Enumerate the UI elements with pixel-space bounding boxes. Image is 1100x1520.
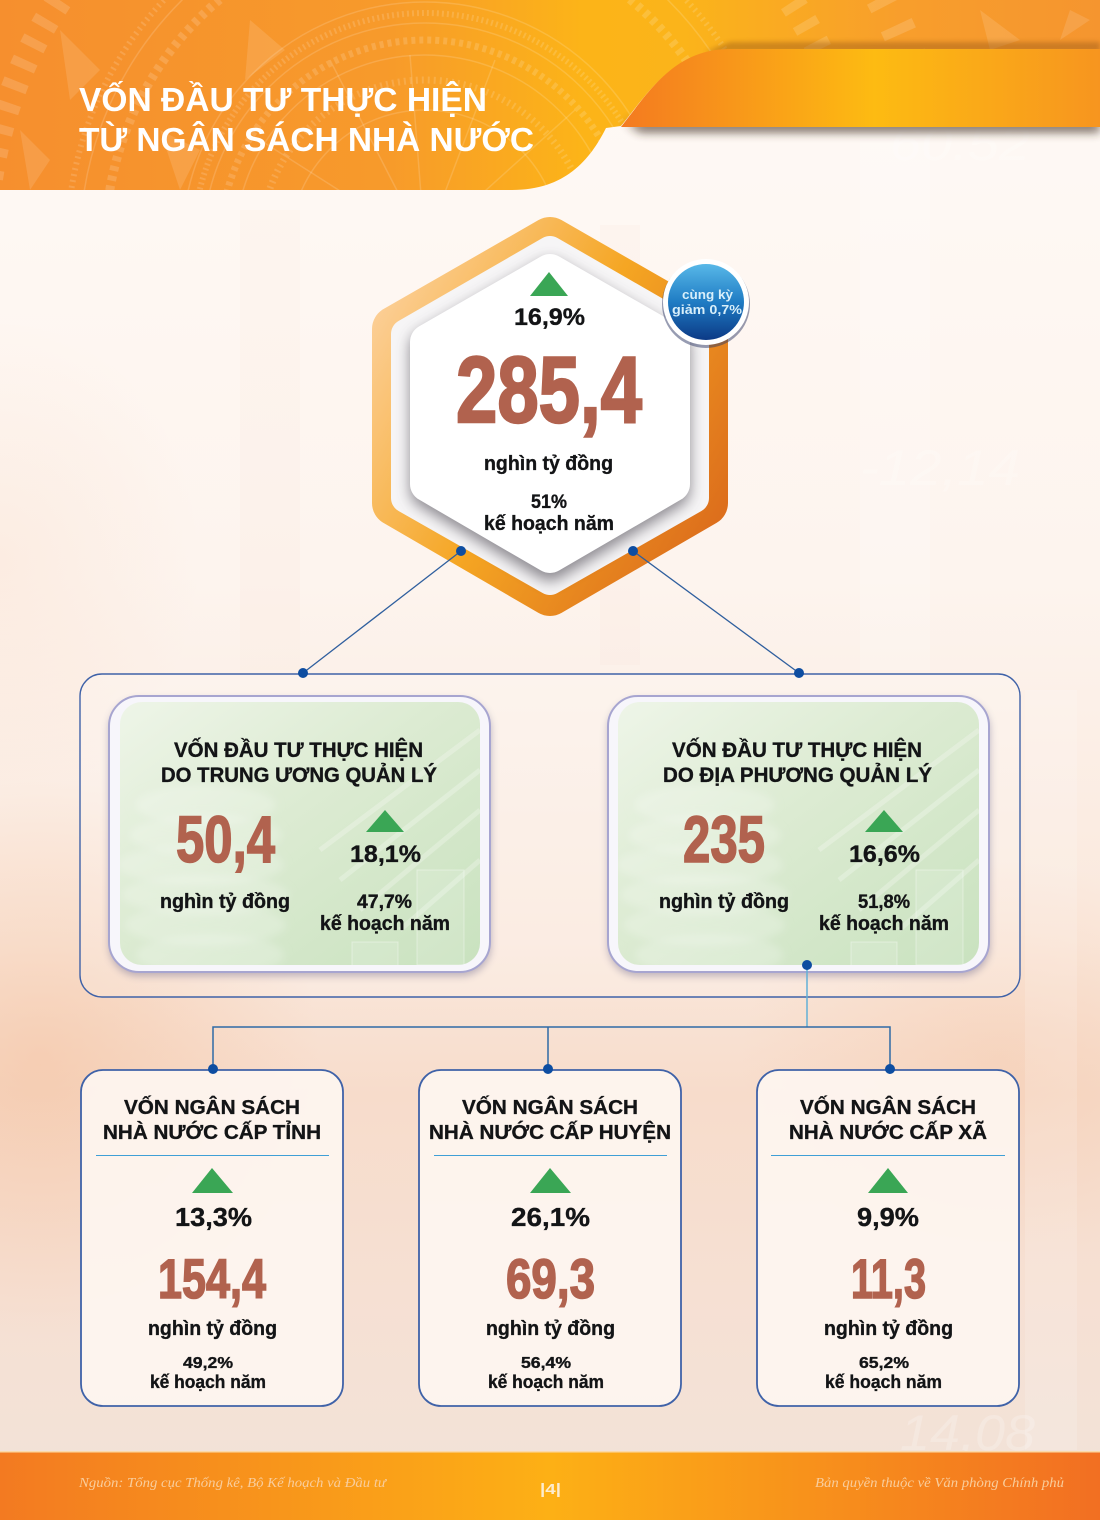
- percent of plan: 47,7%: [357, 892, 412, 913]
- value: 154,4: [158, 1247, 266, 1310]
- card heading: VỐN ĐẦU TƯ THỰC HIỆN: [672, 738, 922, 762]
- coin stack decoration: [614, 730, 979, 977]
- unit: nghìn tỷ đồng: [484, 453, 613, 475]
- icon: green up triangle: [530, 272, 568, 296]
- growth rate: 26,1%: [511, 1202, 590, 1232]
- connector: hexagon to central card: [298, 546, 466, 678]
- hexagon inner face: [428, 272, 672, 555]
- card heading: VỐN NGÂN SÁCH: [462, 1095, 638, 1119]
- percent of plan: 65,2%: [859, 1355, 909, 1372]
- panel: central managed: [109, 696, 491, 977]
- header band shadow: [626, 122, 1100, 132]
- badge: same period: giảm 0,7%: [672, 302, 742, 317]
- growth rate: 18,1%: [350, 841, 421, 868]
- panel: commune level: [757, 1070, 1019, 1406]
- unit: nghìn tỷ đồng: [148, 1318, 277, 1340]
- plan label: kế hoạch năm: [488, 1372, 604, 1392]
- hexagon white plate: [406, 251, 694, 580]
- growth rate: 13,3%: [175, 1202, 252, 1232]
- header drum pattern: [0, 0, 1090, 190]
- percent of plan: 49,2%: [183, 1355, 233, 1372]
- panel: management group frame: [80, 674, 1020, 997]
- icon: green up triangle: [530, 1168, 571, 1193]
- value: 11,3: [851, 1247, 926, 1310]
- card heading: VỐN ĐẦU TƯ THỰC HIỆN: [174, 738, 423, 762]
- plan label: kế hoạch năm: [484, 513, 614, 535]
- growth rate: 16,6%: [849, 841, 920, 868]
- header banner: [0, 0, 1100, 190]
- plan label: kế hoạch năm: [320, 913, 450, 935]
- panel: province level: [81, 1070, 343, 1406]
- coin stack decoration: [115, 730, 480, 977]
- card heading line 2: DO TRUNG ƯƠNG QUẢN LÝ: [161, 763, 437, 787]
- title: TỪ NGÂN SÁCH NHÀ NƯỚC: [79, 121, 534, 158]
- plan label: kế hoạch năm: [825, 1372, 942, 1392]
- card heading: VỐN NGÂN SÁCH: [800, 1095, 976, 1119]
- hexagon: total investment: [395, 240, 705, 593]
- percent of plan: 56,4%: [521, 1355, 571, 1372]
- source note: Nguồn: Tổng cục Thống kê, Bộ Kế hoạch và Đầu tư: [78, 1476, 387, 1491]
- card heading line 2: NHÀ NƯỚC CẤP TỈNH: [103, 1120, 321, 1144]
- growth rate: 16,9%: [514, 304, 585, 331]
- icon: green up triangle: [192, 1168, 233, 1193]
- header ribbon band: [621, 49, 1100, 127]
- page background: -12,14: [860, 440, 1020, 496]
- page background: 14,08: [900, 1405, 1035, 1461]
- plan label: kế hoạch năm: [150, 1372, 266, 1392]
- copyright note: Bản quyền thuộc về Văn phòng Chính phủ: [815, 1476, 1064, 1491]
- card heading line 2: NHÀ NƯỚC CẤP HUYỆN: [429, 1120, 671, 1144]
- icon: green up triangle: [366, 810, 404, 832]
- percent of plan: 51,8%: [858, 892, 910, 913]
- title: VỐN ĐẦU TƯ THỰC HIỆN: [79, 80, 487, 118]
- value: 50,4: [176, 802, 275, 876]
- main value: 285,4: [456, 337, 642, 442]
- unit: nghìn tỷ đồng: [824, 1318, 953, 1340]
- panel: locally managed: [608, 696, 990, 977]
- title: [79, 80, 534, 158]
- card heading line 2: DO ĐỊA PHƯƠNG QUẢN LÝ: [663, 763, 932, 787]
- card heading: VỐN NGÂN SÁCH: [124, 1095, 300, 1119]
- icon: green up triangle: [865, 810, 903, 832]
- unit: nghìn tỷ đồng: [486, 1318, 615, 1340]
- hexagon outer ring: [395, 240, 705, 593]
- growth rate: 9,9%: [857, 1202, 919, 1232]
- header top shadow: [705, 42, 1100, 52]
- connector: hexagon to local card: [628, 546, 804, 678]
- unit: nghìn tỷ đồng: [659, 891, 789, 913]
- connector: local card to three levels: [208, 960, 895, 1074]
- unit: nghìn tỷ đồng: [160, 891, 290, 913]
- card heading line 2: NHÀ NƯỚC CẤP XÃ: [789, 1120, 987, 1144]
- badge: same period: cùng kỳ: [682, 287, 734, 302]
- panel: district level: [419, 1070, 681, 1406]
- plan label: kế hoạch năm: [819, 913, 949, 935]
- footer: [0, 1451, 1100, 1520]
- icon: green up triangle: [868, 1168, 908, 1193]
- percent of plan: 51%: [531, 492, 567, 513]
- value: 69,3: [506, 1247, 595, 1310]
- page background: 60.52: [890, 118, 1030, 171]
- page number: |4|: [540, 1481, 561, 1498]
- hexagon shadow: [428, 278, 672, 563]
- value: 235: [683, 802, 765, 876]
- badge: same period: [662, 259, 750, 348]
